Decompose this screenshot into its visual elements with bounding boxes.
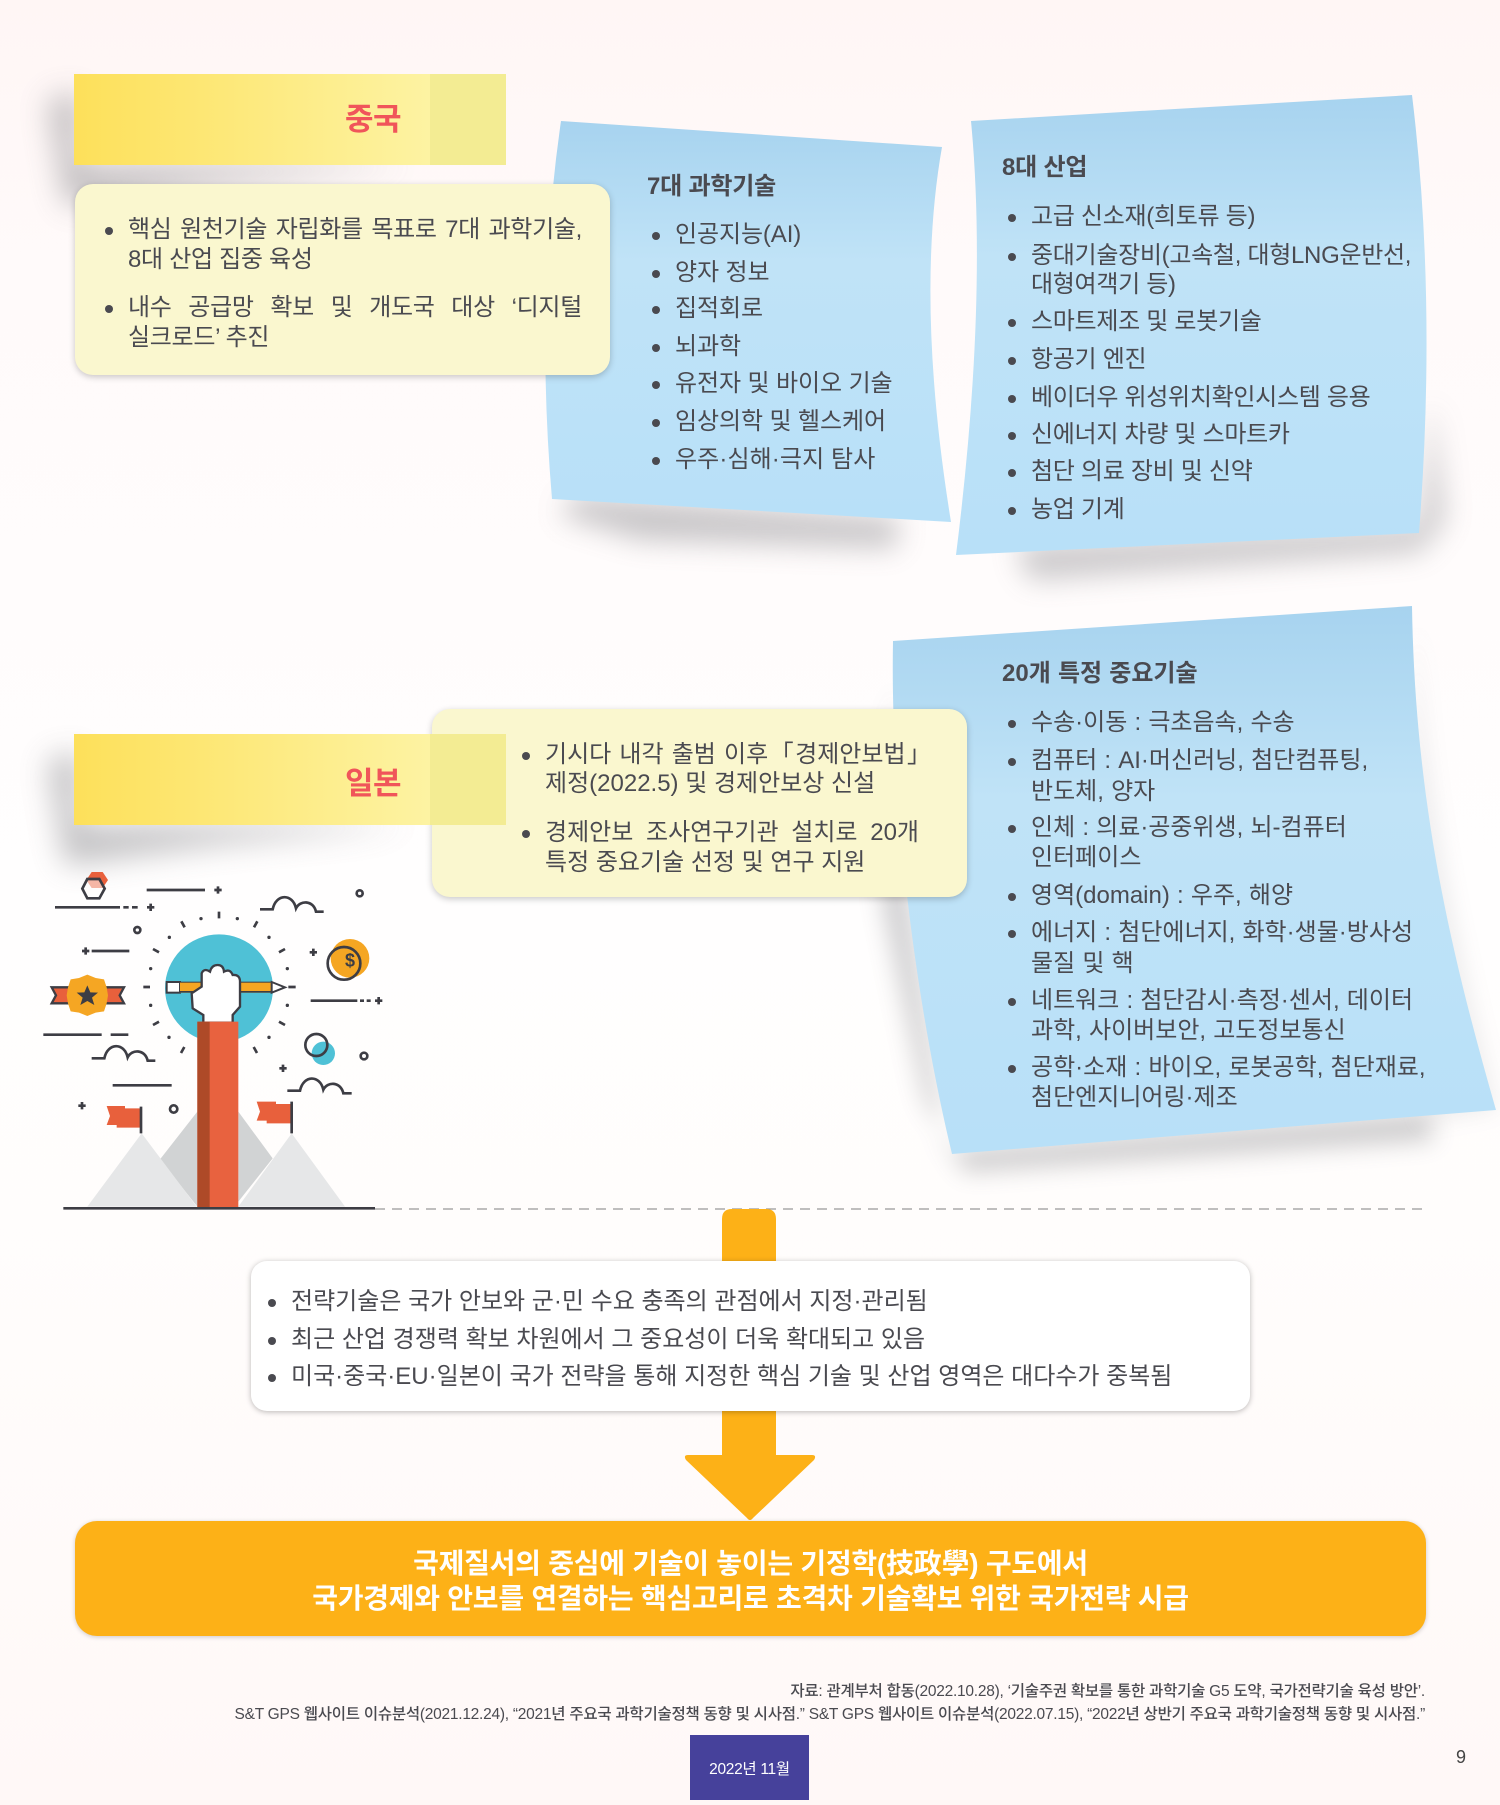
- list: 7대 과학기술 items: 임상의학 및 헬스케어: [675, 408, 886, 434]
- source note: 자료: 관계부처 합동(2022.10.28), ‘기술주권 확보를 통한 과학기술 G5 도약, 국가전략기술 육성 방안’.: [790, 1683, 1425, 1700]
- source note: S&T GPS 웹사이트 이슈분석(2021.12.24), “2021년 주요국 과학기술정책 동향 및 시사점.” S&T GPS 웹사이트 이슈분석(2022.07.15), “2022년 상반기 주요국 과학기술정책 동향 및 시사점.”: [235, 1706, 1425, 1723]
- panel: conclusion white box: [251, 1261, 1250, 1411]
- list: 7대 과학기술 items: 유전자 및 바이오 기술: [675, 370, 893, 396]
- page number: 9: [1456, 1747, 1466, 1767]
- arrow: flow downward: [684, 1209, 816, 1520]
- list: 20개 기술 분야: [1008, 708, 1426, 1110]
- decorative label shadow: Japan: [36, 742, 362, 878]
- bullet: 기시다 내각: [522, 740, 931, 796]
- list: 20개 기술 분야: 영역(domain) : 우주, 해양: [1031, 882, 1293, 908]
- bullet: 내수 공급망: 실크로드’ 추진: [128, 324, 269, 350]
- icon: flags: [107, 1102, 292, 1133]
- list: 7대 과학기술 items: 뇌과학: [675, 332, 741, 360]
- list: 20개 기술 분야: 수송·이동 : 극초음속, 수송: [1031, 708, 1295, 736]
- list: 8대 산업 items: 중대기술장비(고속철, 대형LNG운반선,: [1031, 242, 1411, 268]
- text: message line 1: 국제질서의 중심에 기술이 놓이는 기정학(技政學) 구도에서: [413, 1548, 1088, 1579]
- list: 20개 기술 분야: 과학, 사이버보안, 고도정보통신: [1031, 1016, 1346, 1044]
- list: 7대 과학기술 items: 양자 정보: [675, 258, 770, 286]
- list: 8대 산업 items: 항공기 엔진: [1031, 346, 1146, 372]
- icon: sun circle: [165, 934, 273, 1042]
- icon: overlapping circles: [305, 1034, 335, 1065]
- list: 20개 기술 분야: 공학·소재 : 바이오, 로봇공학, 첨단재료,: [1031, 1054, 1426, 1080]
- heading: 8대 산업: 8대 산업: [1002, 154, 1087, 180]
- panel: China summary note: [75, 184, 610, 375]
- list: 20개 기술 분야: 반도체, 양자: [1031, 778, 1155, 804]
- panel: 7대 과학기술 sticky note: [546, 121, 951, 561]
- list: 8대 산업 items: 첨단 의료 장비 및 신약: [1031, 458, 1252, 484]
- bullet: 기시다 내각: 제정(2022.5) 및 경제안보상 신설: [545, 770, 875, 796]
- heading label: 중국: 중국: [345, 102, 401, 137]
- list: 20개 기술 분야: 물질 및 핵: [1031, 950, 1134, 976]
- panel: 20개 특정 중요기술 sticky note: [872, 606, 1496, 1182]
- decorative label shadow: China: [36, 82, 362, 217]
- list: 7대 과학기술 items: [652, 220, 893, 472]
- source note: [235, 1682, 1425, 1723]
- icon: coin: [328, 939, 369, 980]
- ground line: [63, 1204, 375, 1212]
- list: 8대 산업 items: 베이더우 위성위치확인시스템 응용: [1031, 384, 1370, 410]
- list: 20개 기술 분야: 인터페이스: [1031, 844, 1141, 870]
- illustration: hand raising pencil over mountains: [43, 872, 382, 1210]
- heading: 20개 특정 중요기술: 20개 특정 중요기술: [1002, 660, 1198, 686]
- list: 8대 산업 items: 신에너지 차량 및 스마트카: [1031, 420, 1290, 448]
- text: bullet 2: 최근 산업 경쟁력 확보 차원에서 그 중요성이 더욱 확대되고 있음: [291, 1326, 925, 1352]
- list: 8대 산업 items: 농업 기계: [1031, 496, 1124, 522]
- icon: mountains: [87, 1112, 345, 1207]
- bullet: 기시다 내각: 기시다 내각 출범 이후「경제안보법」: [545, 740, 931, 768]
- bullet: 경제안보 조사연구기관: 경제안보 조사연구기관 설치로 20개: [545, 818, 919, 846]
- list: 7대 과학기술 items: 인공지능(AI): [675, 220, 801, 248]
- icon: medal with star: [52, 975, 124, 1016]
- list: 8대 산업 items: [1008, 202, 1411, 522]
- heading label: 일본: 일본: [345, 766, 401, 801]
- bullet: 내수 공급망: [105, 294, 582, 350]
- icon: coin: $: [345, 951, 355, 971]
- list: 8대 산업 items: 고급 신소재(희토류 등): [1031, 202, 1255, 230]
- panel: 8대 산업 sticky note: [956, 95, 1456, 592]
- list: 20개 기술 분야: 네트워크 : 첨단감시·측정·센서, 데이터: [1031, 986, 1413, 1014]
- icon: hexagons: [82, 872, 108, 898]
- heading: 7대 과학기술: 7대 과학기술: [647, 172, 776, 200]
- heading label: 중국: [74, 74, 506, 165]
- bullet: 핵심 원천기술: 8대 산업 집중 육성: [128, 246, 313, 272]
- list: 20개 기술 분야: 에너지 : 첨단에너지, 화학·생물·방사성: [1031, 918, 1413, 946]
- bullet: 핵심 원천기술: 핵심 원천기술 자립화를 목표로 7대 과학기술,: [128, 216, 582, 242]
- list: 7대 과학기술 items: 집적회로: [675, 294, 763, 322]
- date tab: [690, 1735, 809, 1800]
- icon: raised arm: [197, 1022, 238, 1207]
- icon: hand: [192, 965, 240, 1023]
- text: bullet 3: 미국·중국·EU·일본이 국가 전략을 통해 지정한 핵심 기술 및 산업 영역은 대다수가 중복됨: [291, 1362, 1172, 1390]
- list: 8대 산업 items: 스마트제조 및 로봇기술: [1031, 308, 1262, 334]
- bullet: 내수 공급망: 내수 공급망 확보 및 개도국 대상 ‘디지털: [128, 294, 582, 320]
- text: bullet 1: 전략기술은 국가 안보와 군·민 수요 충족의 관점에서 지정·관리됨: [291, 1288, 928, 1314]
- text: message line 2: 국가경제와 안보를 연결하는 핵심고리로 초격차 기술확보 위한 국가전략 시급: [312, 1583, 1189, 1614]
- bullet: 경제안보 조사연구기관: [522, 818, 919, 876]
- list: 7대 과학기술 items: 우주·심해·극지 탐사: [675, 446, 875, 472]
- list: 20개 기술 분야: 첨단엔지니어링·제조: [1031, 1084, 1238, 1110]
- heading label: 일본: [74, 734, 506, 825]
- bullet: 경제안보 조사연구기관: 특정 중요기술 선정 및 연구 지원: [545, 848, 865, 876]
- list: 20개 기술 분야: 컴퓨터 : AI·머신러닝, 첨단컴퓨팅,: [1031, 746, 1368, 774]
- icon: pencil: [167, 982, 285, 993]
- date tab: 2022년 11월: [709, 1761, 790, 1778]
- list: 20개 기술 분야: 인체 : 의료·공중위생, 뇌-컴퓨터: [1031, 814, 1347, 840]
- panel: Japan summary note: [432, 709, 967, 897]
- list: 8대 산업 items: 대형여객기 등): [1031, 270, 1176, 298]
- bullet: 핵심 원천기술: [105, 216, 582, 272]
- panel: orange key message: [75, 1521, 1426, 1636]
